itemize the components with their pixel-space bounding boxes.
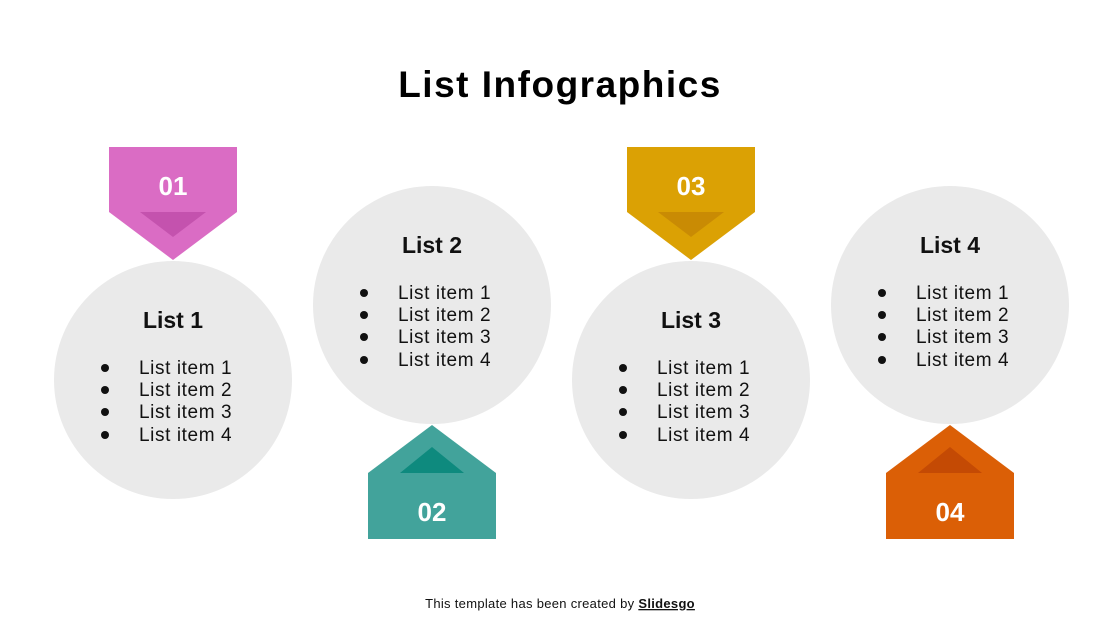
heading list 4: List 4 — [920, 232, 980, 258]
heading list 3: List 3 — [661, 307, 721, 333]
items list 1: List item 1 — [139, 358, 232, 379]
tag 01: 01 — [159, 171, 187, 201]
panel: list 3 — [572, 147, 810, 499]
items list 4 — [878, 283, 1009, 371]
items list 4: List item 1 — [916, 283, 1009, 304]
items list 4: List item 2 — [916, 305, 1009, 326]
items list 1 — [101, 358, 232, 446]
items list 1: List item 3 — [139, 402, 232, 423]
heading list 2: List 2 — [402, 232, 462, 258]
footer credit: This template has been created by Slidesgo — [425, 596, 695, 611]
items list 3: List item 4 — [657, 425, 750, 446]
circle 3 — [572, 261, 810, 499]
items list 3: List item 3 — [657, 402, 750, 423]
items list 2: List item 4 — [398, 350, 491, 371]
title: List Infographics — [398, 64, 722, 105]
items list 4: List item 4 — [916, 350, 1009, 371]
tag 02: 02 — [418, 497, 446, 527]
items list 1: List item 2 — [139, 380, 232, 401]
tag 04 — [886, 425, 1014, 539]
items list 2 — [360, 283, 491, 371]
items list 3: List item 1 — [657, 358, 750, 379]
tag 03: 03 — [677, 171, 705, 201]
tag 01 — [109, 147, 237, 260]
tag 02 — [368, 425, 496, 539]
panel: list 2 — [313, 186, 551, 539]
items list 3 — [619, 358, 750, 446]
items list 2: List item 1 — [398, 283, 491, 304]
items list 2: List item 3 — [398, 327, 491, 348]
tag 04: 04 — [936, 497, 965, 527]
heading list 1: List 1 — [143, 307, 203, 333]
items list 3: List item 2 — [657, 380, 750, 401]
items list 1: List item 4 — [139, 425, 232, 446]
panel: list 4 — [831, 186, 1069, 539]
circle 2 — [313, 186, 551, 424]
circle 1 — [54, 261, 292, 499]
items list 2: List item 2 — [398, 305, 491, 326]
tag 03 — [627, 147, 755, 260]
panel: list 1 — [54, 147, 292, 499]
circle 4 — [831, 186, 1069, 424]
items list 4: List item 3 — [916, 327, 1009, 348]
